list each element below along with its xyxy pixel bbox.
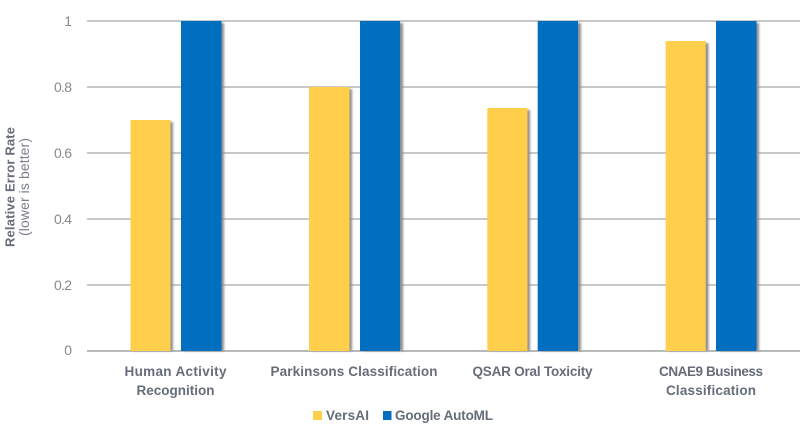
category labels [124,364,763,398]
y axis tick labels: 0.8 [54,79,72,95]
legend: Google AutoML [395,408,493,423]
legend [313,408,493,423]
bars: Human Activity Recognition [130,21,224,351]
y axis title [2,127,32,247]
y axis tick labels: 1 [64,13,72,29]
y axis tick labels: 0.4 [54,211,72,227]
y axis title: Relative Error Rate [2,127,18,247]
legend: VersAI [326,408,369,423]
y axis title: (lower is better) [16,138,32,236]
bars: CNAE9 Business Classification [666,21,759,351]
category labels: CNAE9 Business [659,364,763,379]
category labels: Parkinsons Classification [270,364,438,379]
category labels: QSAR Oral Toxicity [472,364,593,379]
y axis tick labels: 0 [64,342,72,358]
category labels: Classification [666,383,756,398]
y axis tick labels: 0.6 [54,145,72,161]
y axis tick labels: 0.2 [54,277,72,293]
category labels: Human Activity [124,364,227,379]
bars: QSAR Oral Toxicity [487,21,581,351]
category labels: Recognition [136,383,214,398]
bars: Parkinsons Classification [309,21,403,351]
y axis tick labels [54,13,72,358]
